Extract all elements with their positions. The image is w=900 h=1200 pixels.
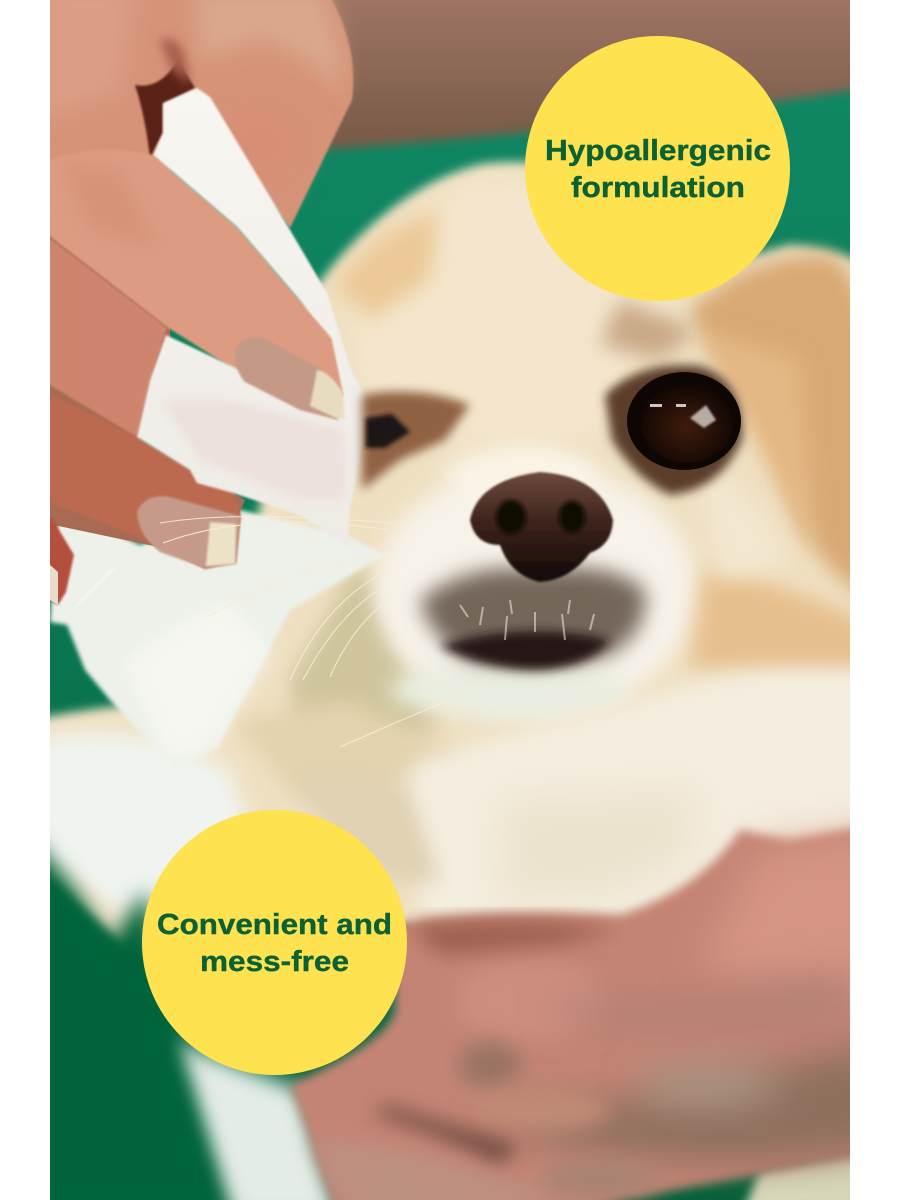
- third finger: [50, 395, 242, 570]
- tan cheek and neck: [682, 566, 850, 676]
- callout: hypoallergenic formulation: formulation: [571, 172, 745, 204]
- dog right eye: [605, 365, 742, 495]
- floor green at bottom left, over the fur edge: [30, 835, 232, 1200]
- blurred arm in the background: [300, 0, 900, 150]
- callout: convenient and mess-free: mess-free: [200, 946, 349, 978]
- upper palm and fingers: [30, 0, 353, 605]
- lower hands holding the dog: [290, 820, 900, 1200]
- dog nose and muzzle fur: [420, 472, 646, 670]
- dog left eye and brow: [362, 392, 470, 490]
- shaded skin under the fingers: [50, 146, 245, 546]
- callout: convenient and mess-free: Convenient and: [157, 909, 392, 941]
- whiskers: [160, 516, 450, 747]
- white wipe lower sheet: [50, 505, 385, 770]
- callout: hypoallergenic formulation: [525, 36, 790, 301]
- olive shaded fur beneath the wipe: [284, 568, 441, 736]
- fingernail: index finger: [235, 337, 343, 420]
- callout: convenient and mess-free: [142, 810, 407, 1075]
- index finger: [50, 151, 344, 396]
- fourth finger: [50, 517, 76, 606]
- white chest fur: [390, 668, 900, 925]
- pale face and muzzle: [375, 465, 695, 715]
- second finger: [50, 239, 168, 436]
- forehead: [350, 175, 700, 440]
- fingernail: third finger: [137, 496, 240, 568]
- right ear, tan: [682, 238, 850, 600]
- white wipe upper fold: [137, 88, 370, 547]
- callout: hypoallergenic formulation: Hypoallergenic: [545, 135, 771, 167]
